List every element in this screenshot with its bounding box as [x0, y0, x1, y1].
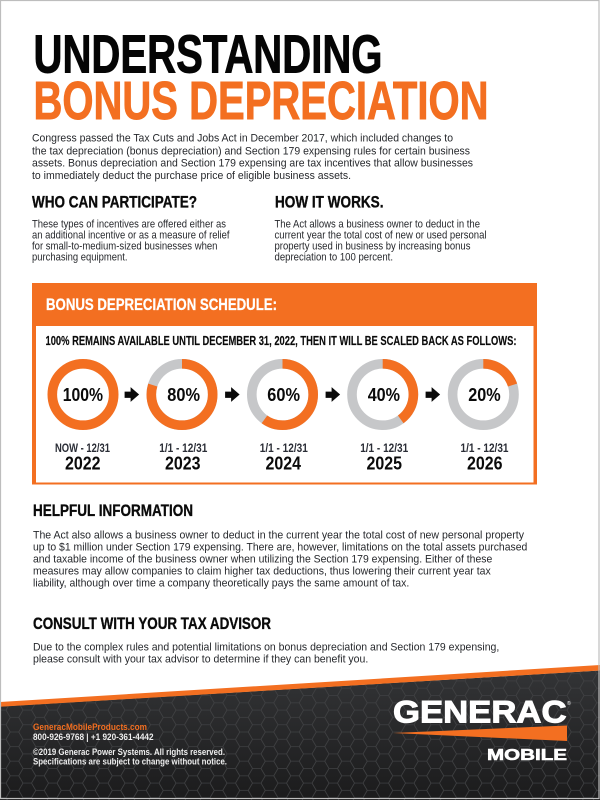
donut: 80% 2023: 2023 [165, 454, 200, 474]
panel: who can participate [32, 193, 230, 264]
donut: 60% 2024 [252, 364, 313, 474]
footer contact and copyright text: ©2019 Generac Power Systems. All rights reserved. [33, 747, 225, 757]
panel: who can participate: an additional incentive or as a measure of relief [32, 230, 230, 242]
footer contact and copyright text [33, 722, 227, 767]
panel: consult with your tax advisor [33, 614, 499, 666]
donut: 100% 2022: 100% [63, 385, 103, 405]
logo: Generac Mobile [393, 694, 571, 764]
panel: how it works: depreciation to 100 percent. [274, 252, 393, 264]
panel: who can participate: for small-to-medium-sized businesses when [32, 241, 218, 253]
panel: consult with your tax advisor: CONSULT WITH YOUR TAX ADVISOR [33, 614, 271, 633]
panel: helpful information: liability, although over time a company theoretically pays the same amount of tax. [33, 578, 409, 590]
arrow [125, 388, 138, 401]
intro text block: to immediately deduct the purchase price of eligible business assets. [32, 170, 351, 182]
panel: how it works: current year the total cost of new or used personal [274, 230, 486, 242]
donut: 20% 2026: 1/1 - 12/31 [460, 443, 509, 455]
footer contact and copyright text: 800-926-9768 | +1 920-361-4442 [33, 732, 154, 742]
panel: consult with your tax advisor: please consult with your tax advisor to determine if they can benefit you. [33, 654, 368, 666]
panel: helpful information: HELPFUL INFORMATION [33, 501, 193, 520]
donut: 100% 2022 [52, 364, 114, 474]
donut: 100% 2022: NOW - 12/31 [55, 443, 110, 455]
logo: Generac Mobile: GENERAC [393, 694, 566, 730]
donut: 60% 2024: 1/1 - 12/31 [260, 443, 308, 455]
panel: helpful information: The Act also allows a business owner to deduct in the current year the total cost of new personal property [33, 529, 524, 541]
panel: how it works [274, 193, 486, 264]
schedule heading: BONUS DEPRECIATION SCHEDULE: [46, 295, 277, 314]
footer contact and copyright text: GeneracMobileProducts.com [33, 722, 147, 733]
arrow [426, 388, 440, 401]
panel: helpful information: measures may allow companies to claim higher tax deductions, thus lowering their current year tax [33, 566, 491, 578]
intro text block [32, 133, 473, 182]
logo: Generac Mobile: MOBILE [487, 747, 567, 764]
intro text block: Congress passed the Tax Cuts and Jobs Act in December 2017, which included changes to [32, 133, 453, 145]
panel: helpful information [33, 501, 527, 590]
donut: 100% 2022: 2022 [65, 454, 100, 474]
panel: who can participate: These types of incentives are offered either as [32, 219, 226, 231]
arrow [226, 388, 239, 401]
donut: 80% 2023: 1/1 - 12/31 [159, 443, 208, 455]
panel: helpful information: up to $1 million under Section 179 expensing. There are, however, limitations on the total assets purchased [33, 542, 527, 554]
title [34, 24, 488, 131]
donut: 40% 2025: 40% [368, 385, 400, 405]
panel: how it works: HOW IT WORKS. [275, 193, 384, 211]
donut: 40% 2025: 1/1 - 12/31 [360, 443, 409, 455]
panel: consult with your tax advisor: Due to the complex rules and potential limitations on bonus depreciation and Section 179 expensing, [33, 641, 499, 653]
footer band [0, 665, 600, 800]
panel: how it works: property used in business by increasing bonus [274, 241, 470, 253]
intro text block: the tax depreciation (bonus depreciation) and Section 179 expensing rules for certain business [32, 145, 470, 157]
donut: 40% 2025 [352, 364, 413, 474]
donut: 80% 2023 [151, 364, 213, 474]
panel: who can participate: WHO CAN PARTICIPATE? [32, 193, 197, 211]
donut: 20% 2026 [453, 364, 514, 474]
donut: 20% 2026: 20% [468, 385, 501, 405]
footer contact and copyright text: Specifications are subject to change without notice. [33, 757, 227, 767]
title: UNDERSTANDING [34, 24, 382, 84]
intro text block: assets. Bonus depreciation and Section 179 expensing are tax incentives that allow businesses [32, 158, 473, 170]
panel: who can participate: purchasing equipment. [32, 252, 128, 264]
donut: 60% 2024: 60% [267, 385, 300, 405]
donut: 40% 2025: 2025 [366, 454, 402, 474]
logo: Generac Mobile: ® [567, 700, 571, 707]
panel: how it works: The Act allows a business owner to deduct in the [274, 219, 480, 231]
donut: 80% 2023: 80% [167, 385, 200, 405]
donut: 60% 2024: 2024 [266, 454, 301, 474]
panel: bonus depreciation schedule [32, 283, 537, 484]
arrow [326, 388, 340, 401]
donut: 20% 2026: 2026 [467, 454, 502, 474]
panel: helpful information: and taxable income of the business owner when utilizing the Section 179 expensing. Either of these [33, 554, 492, 566]
